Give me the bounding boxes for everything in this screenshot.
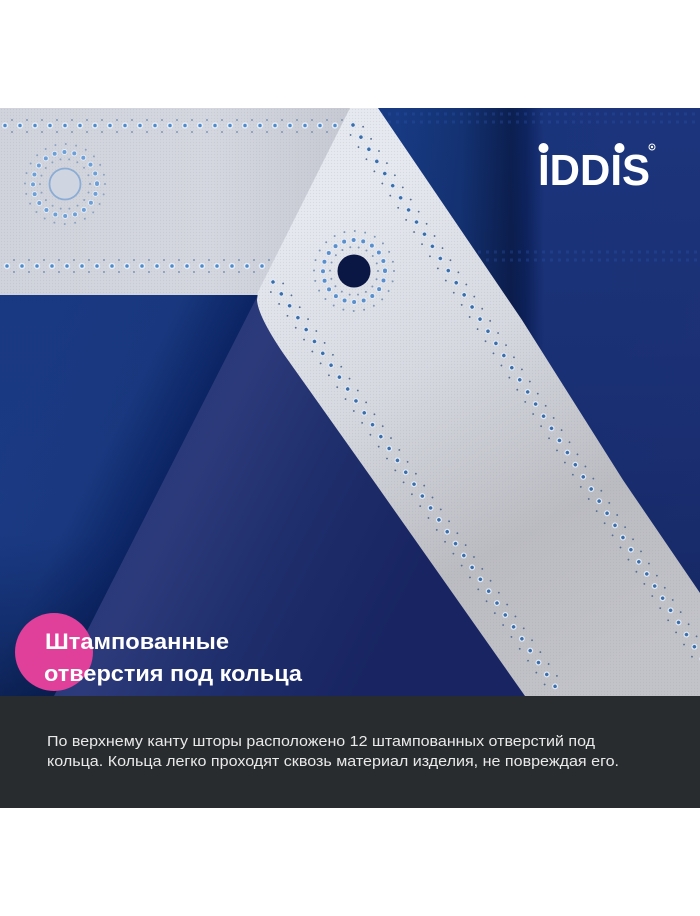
flap eyelet, open hole <box>314 231 394 311</box>
pink accent circle <box>15 613 93 691</box>
description text <box>47 733 619 770</box>
description panel <box>0 696 700 808</box>
band eyelet, closed <box>25 144 105 224</box>
curtain top band <box>0 108 352 295</box>
perforated strip left <box>267 278 565 696</box>
logo: IDDIS: IDDIS <box>538 146 650 195</box>
right curtain panel <box>378 108 700 593</box>
perforated strip right <box>347 121 700 665</box>
left curtain panel <box>0 290 270 696</box>
infographic canvas <box>0 108 700 808</box>
description text: кольца. Кольца легко проходят сквозь материал изделия, не повреждая его. <box>47 753 619 770</box>
perforated strip bottom <box>7 260 272 272</box>
heading <box>44 629 303 686</box>
folded curtain panel <box>54 295 530 696</box>
photo: shower curtain <box>0 108 700 696</box>
heading: отверстия под кольца <box>44 661 303 686</box>
perforated strip top <box>5 120 345 132</box>
folded white flap <box>257 108 700 696</box>
heading: Штампованные <box>45 629 229 654</box>
description text: По верхнему канту шторы расположено 12 штампованных отверстий под <box>47 733 595 750</box>
